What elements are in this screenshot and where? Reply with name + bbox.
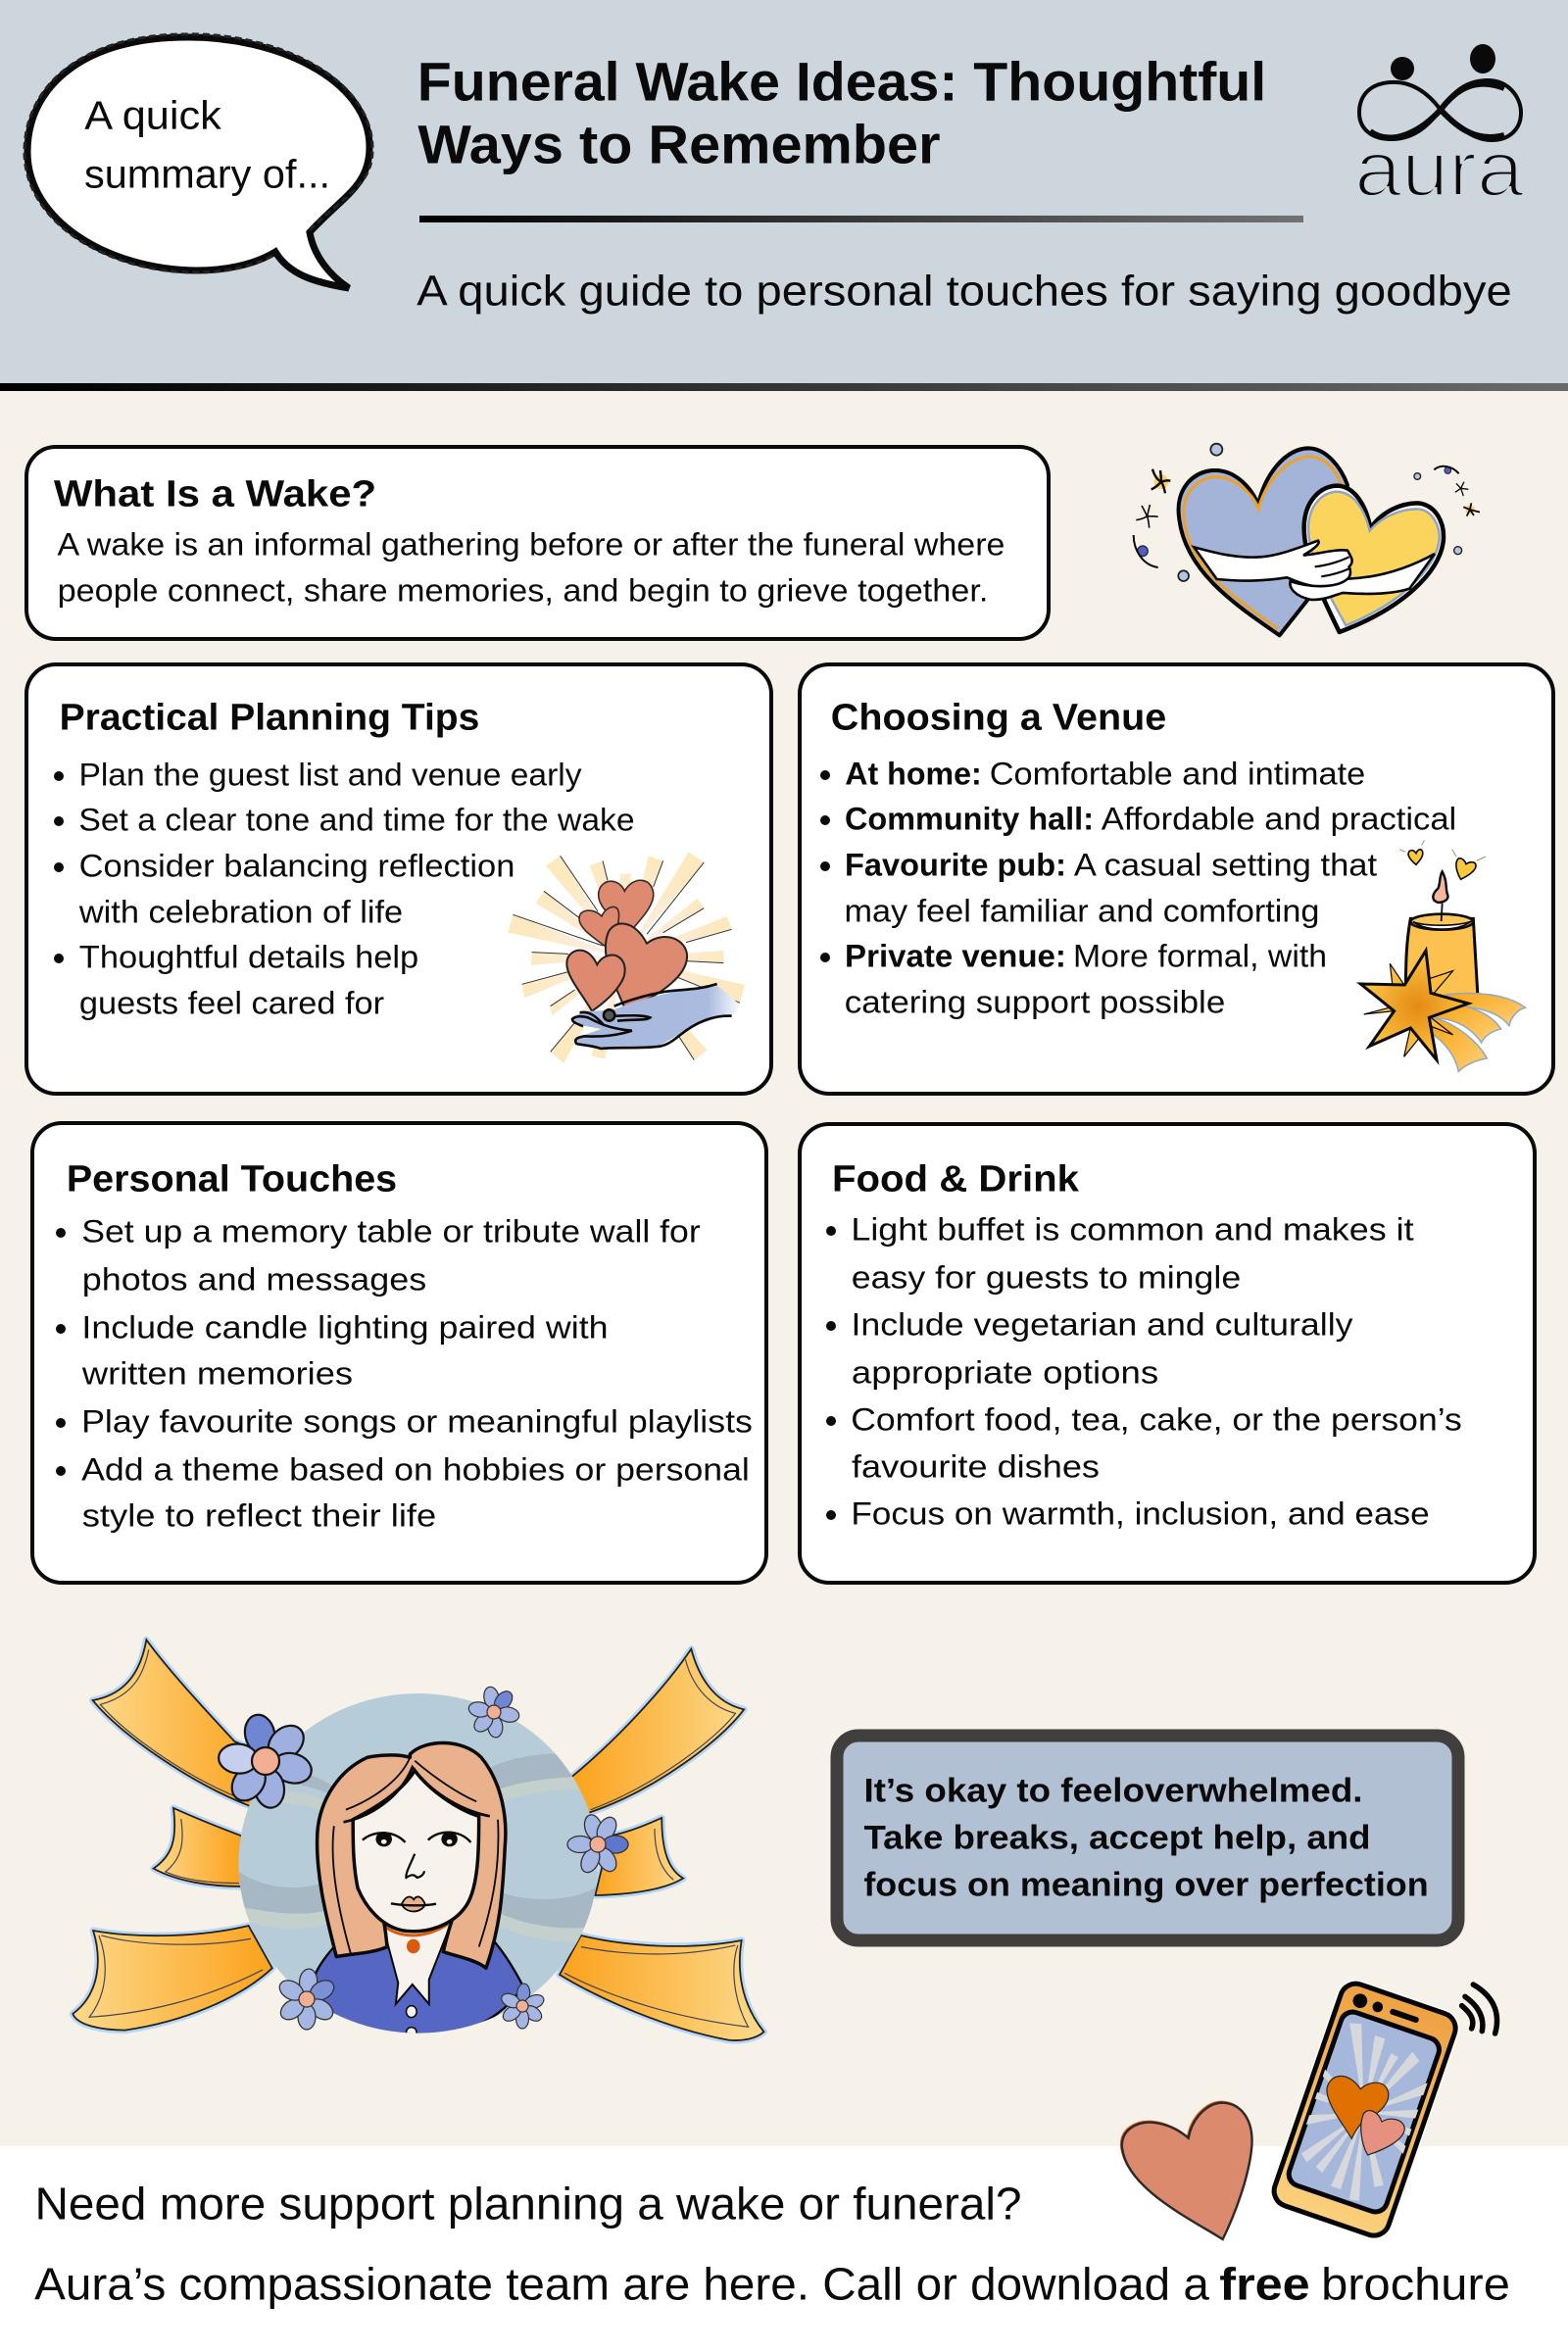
panel: choosing a venue xyxy=(800,664,1553,1094)
bullet list: photos and messages xyxy=(82,1262,426,1298)
header band xyxy=(0,0,1568,391)
ribbons xyxy=(73,1640,763,2040)
flower: top xyxy=(467,1686,520,1739)
bullet list: At home: xyxy=(845,757,982,792)
bullet list: guests feel cared for xyxy=(79,986,384,1021)
heading: Practical Planning Tips xyxy=(60,698,479,739)
title: Ways to Remember xyxy=(417,114,941,175)
bullet list: may feel familiar and comforting xyxy=(845,894,1319,929)
title rule xyxy=(419,216,1303,222)
bullet list: Set a clear tone and time for the wake xyxy=(78,803,635,838)
bullet list: A casual setting that xyxy=(1074,848,1377,883)
bullet list xyxy=(826,1212,1462,1532)
callout: it's okay to feel overwhelmed: It’s okay to feeloverwhelmed. xyxy=(863,1773,1363,1810)
icon: hugging hearts xyxy=(1134,444,1480,635)
logo: aura xyxy=(1354,44,1524,213)
flower: lower left xyxy=(276,1968,337,2030)
bullet list: Private venue: xyxy=(845,939,1066,974)
speech bubble: summary of... xyxy=(84,152,330,197)
bullet list: with celebration of life xyxy=(78,895,403,930)
callout: it's okay to feel overwhelmed xyxy=(837,1736,1458,1940)
panel: food and drink xyxy=(800,1124,1535,1583)
illustration: woman portrait with ribbons and flowers xyxy=(73,1640,763,2040)
footer band xyxy=(0,2146,1568,2352)
bullet list: written memories xyxy=(81,1356,353,1392)
bullet list: style to reflect their life xyxy=(82,1498,436,1534)
panel: practical planning tips xyxy=(26,664,771,1094)
bullet list: favourite dishes xyxy=(852,1449,1100,1485)
title: Funeral Wake Ideas: Thoughtful xyxy=(417,51,1266,113)
icon: large heart xyxy=(1121,2102,1252,2239)
bullet list: Focus on warmth, inclusion, and ease xyxy=(851,1496,1430,1532)
bullet list: Favourite pub: xyxy=(845,848,1066,883)
footer text: free xyxy=(1219,2259,1310,2310)
bullet list: easy for guests to mingle xyxy=(852,1260,1241,1296)
flower: lower right xyxy=(499,1984,546,2029)
footer text xyxy=(34,2179,1510,2310)
heading: Food & Drink xyxy=(832,1159,1080,1200)
bullet list: More formal, with xyxy=(1073,939,1327,974)
footer text: brochure xyxy=(1321,2259,1510,2310)
panel: what is a wake xyxy=(26,447,1049,639)
bullet list: appropriate options xyxy=(852,1355,1158,1391)
bullet list xyxy=(54,758,635,1021)
bullet list: Light buffet is common and makes it xyxy=(851,1212,1414,1248)
callout: it's okay to feel overwhelmed: focus on meaning over perfection xyxy=(863,1867,1429,1904)
icon: candle with star xyxy=(1360,840,1526,1071)
icon: phone with hearts xyxy=(1268,1979,1497,2239)
bullet list: Include candle lighting paired with xyxy=(81,1310,609,1346)
heading: Choosing a Venue xyxy=(831,698,1166,739)
callout: it's okay to feel overwhelmed: Take breaks, accept help, and xyxy=(863,1820,1371,1857)
bullet list: catering support possible xyxy=(845,985,1225,1020)
body text xyxy=(58,527,1004,609)
bullet list xyxy=(820,757,1456,1020)
footer text: Need more support planning a wake or funeral? xyxy=(34,2179,1022,2230)
bullet list: Consider balancing reflection xyxy=(79,849,514,884)
flower: right xyxy=(567,1813,628,1876)
bullet list: Comfort food, tea, cake, or the person’s xyxy=(851,1402,1462,1438)
bullet list: Affordable and practical xyxy=(1102,802,1456,837)
heading: Personal Touches xyxy=(67,1159,397,1200)
bullet list: Community hall: xyxy=(845,802,1094,837)
logo: aura: aura xyxy=(1354,124,1524,213)
bullet list: Set up a memory table or tribute wall for xyxy=(81,1214,701,1250)
title xyxy=(417,51,1266,175)
flower: large xyxy=(218,1712,315,1810)
panel: personal touches xyxy=(32,1123,766,1583)
bullet list: Play favourite songs or meaningful playlists xyxy=(81,1404,753,1440)
portrait xyxy=(238,1693,600,2038)
body text: people connect, share memories, and begin to grieve together. xyxy=(58,573,988,609)
icon: hearts over open hand with rays xyxy=(508,852,745,1063)
bullet list: Add a theme based on hobbies or personal xyxy=(81,1452,750,1488)
subtitle: A quick guide to personal touches for saying goodbye xyxy=(416,268,1512,316)
bullet list: Plan the guest list and venue early xyxy=(78,758,582,793)
bullet list: Comfortable and intimate xyxy=(990,757,1365,792)
bullet list: Thoughtful details help xyxy=(79,940,418,975)
bullet list: Include vegetarian and culturally xyxy=(851,1307,1353,1343)
heading: What Is a Wake? xyxy=(54,474,376,515)
footer text: Aura’s compassionate team are here. Call or download a xyxy=(34,2259,1209,2310)
speech bubble xyxy=(24,34,372,288)
bullet list xyxy=(56,1214,753,1534)
body text: A wake is an informal gathering before or after the funeral where xyxy=(58,527,1004,563)
speech bubble: A quick xyxy=(84,93,221,138)
